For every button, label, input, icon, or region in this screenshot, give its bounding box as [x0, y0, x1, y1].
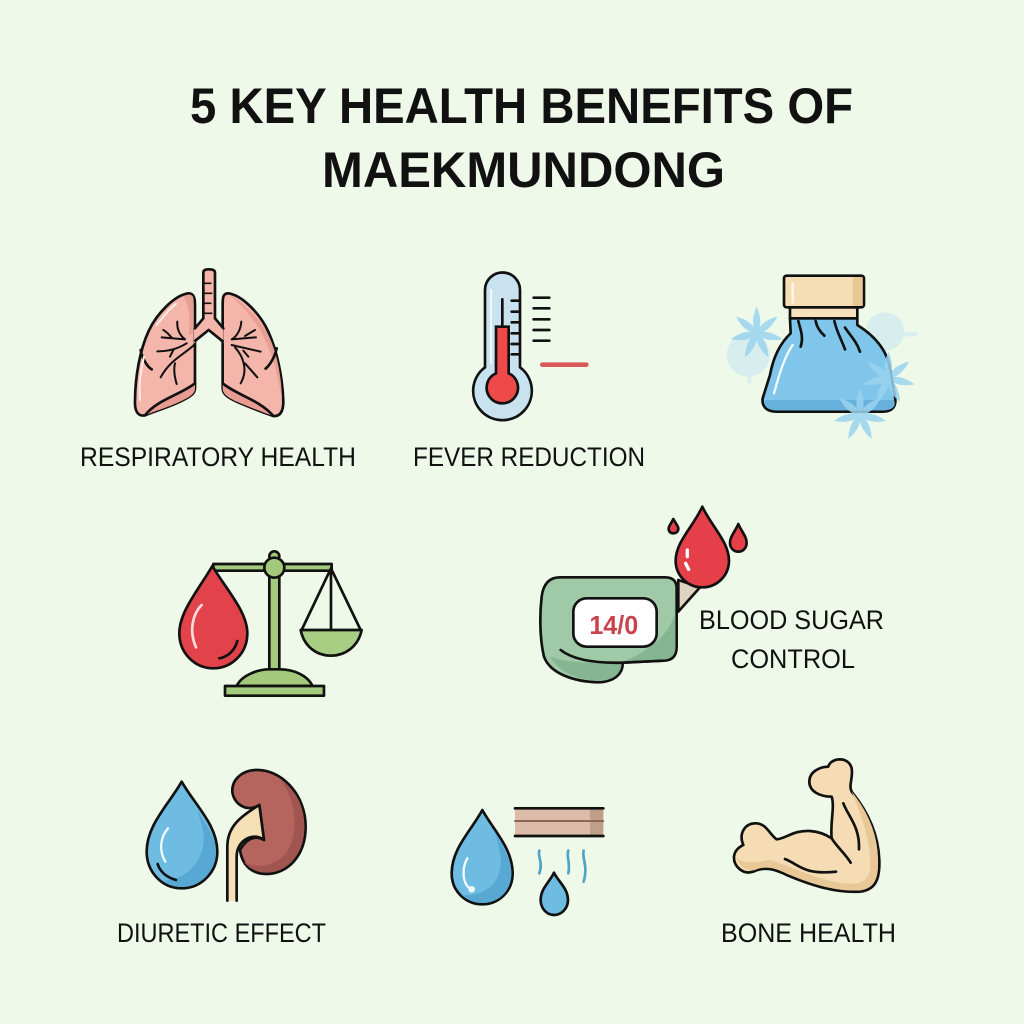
label: fever reduction: FEVER REDUCTION	[413, 442, 645, 472]
icon: blood sugar meter	[540, 507, 747, 682]
icon: lungs	[135, 269, 283, 416]
icon: flexed arm bone	[734, 759, 879, 892]
icon: thermometer	[473, 272, 586, 420]
icon: water drop and kidney	[147, 770, 306, 901]
icon: herbal pouch with flowers	[727, 276, 915, 441]
title: 5 KEY HEALTH BENEFITS OF	[190, 78, 853, 134]
icon: blood sugar meter: 14/0	[589, 610, 638, 640]
label: blood sugar control: CONTROL	[731, 644, 855, 674]
label: bone health: BONE HEALTH	[721, 918, 896, 948]
title: MAEKMUNDONG	[322, 142, 725, 198]
title	[190, 78, 853, 198]
icon: water drops and band	[452, 808, 603, 915]
label: blood sugar control	[699, 605, 884, 674]
label: blood sugar control: BLOOD SUGAR	[699, 605, 884, 635]
label: diuretic effect: DIURETIC EFFECT	[117, 918, 326, 948]
label: respiratory health: RESPIRATORY HEALTH	[80, 442, 356, 472]
icon: balance scale with blood drop	[179, 551, 362, 696]
